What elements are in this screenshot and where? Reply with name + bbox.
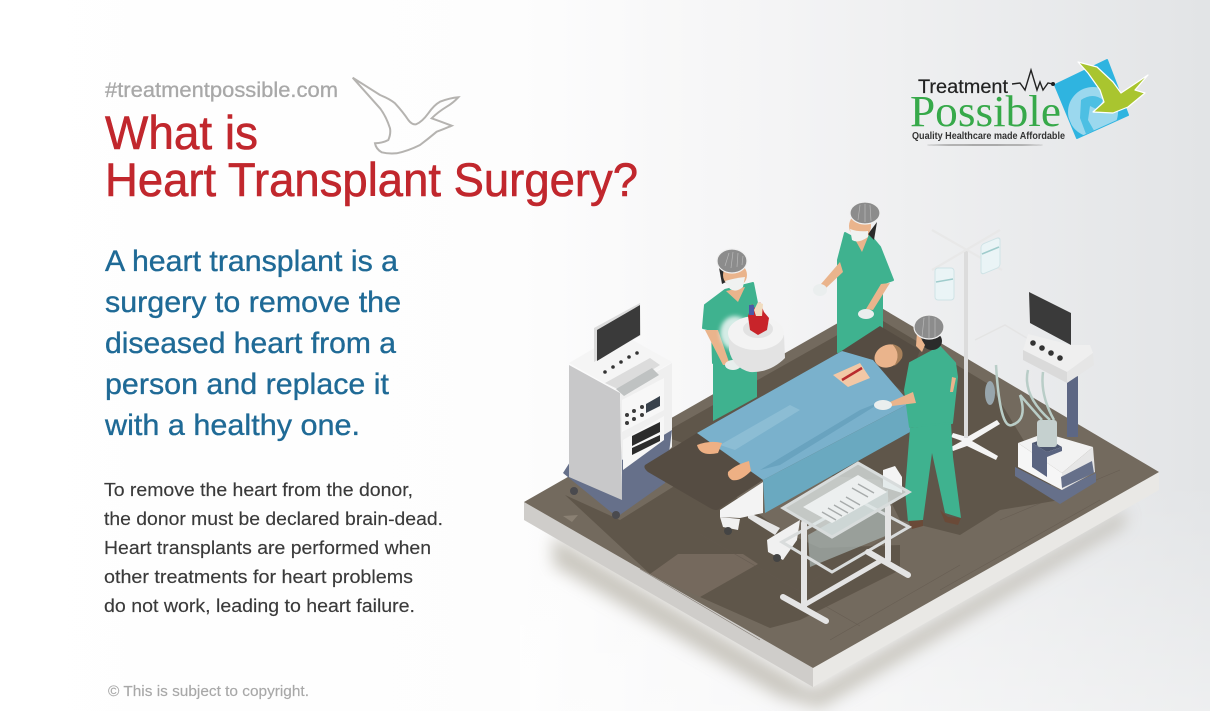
logo tile with globe: [1055, 60, 1128, 138]
logo: [910, 60, 1148, 146]
ventilator monitor: [1029, 292, 1071, 345]
doctor in foreground: [874, 315, 961, 529]
website tag: #treatmentpossible.com: [105, 79, 338, 102]
table pedestal block: [883, 466, 902, 493]
head end mattress: [840, 326, 920, 392]
lead definition text: diseased heart from a: [105, 327, 397, 360]
doctor standing at back: [813, 202, 893, 352]
left machine: [563, 303, 672, 519]
IV stand: [932, 230, 1002, 460]
body text: To remove the heart from the donor,: [104, 479, 413, 500]
lead definition text: [104, 245, 401, 442]
instrument cart: [782, 463, 909, 621]
floor shadows: [565, 315, 1060, 628]
lead definition text: A heart transplant is a: [105, 245, 399, 278]
platform shadow: [553, 510, 1125, 708]
body text: [104, 479, 443, 616]
operating table: [644, 326, 920, 562]
body text: do not work, leading to heart failure.: [104, 595, 415, 616]
monitor: [594, 303, 641, 362]
logo heartbeat line: [1012, 70, 1055, 90]
body text: the donor must be declared brain-dead.: [104, 508, 443, 529]
title: Heart Transplant Surgery?: [105, 153, 638, 206]
icon: bird outline: [353, 78, 458, 154]
ventilator: [975, 292, 1096, 504]
blue drape: [697, 351, 910, 513]
incision site: [833, 363, 870, 387]
logo wordmark: Treatment: [918, 77, 1009, 98]
patient feet: [697, 442, 751, 480]
heart in cold container: [720, 302, 785, 372]
logo: Possible: [910, 87, 1061, 136]
platform: [524, 303, 1159, 687]
doctor holding donor heart: [703, 249, 785, 421]
lead definition text: with a healthy one.: [104, 409, 360, 442]
copyright note: © This is subject to copyright.: [108, 684, 309, 700]
illustration: operating room: [524, 202, 1159, 708]
title: [105, 106, 638, 206]
foot end mattress: [644, 433, 763, 510]
body text: other treatments for heart problems: [104, 566, 413, 587]
lead definition text: person and replace it: [105, 368, 389, 401]
logo bird: [1078, 62, 1148, 113]
patient head: [871, 340, 905, 372]
title: What is: [105, 106, 258, 159]
body text: Heart transplants are performed when: [104, 537, 431, 558]
logo tagline: Quality Healthcare made Affordable: [912, 131, 1065, 142]
lead definition text: surgery to remove the: [105, 286, 401, 319]
